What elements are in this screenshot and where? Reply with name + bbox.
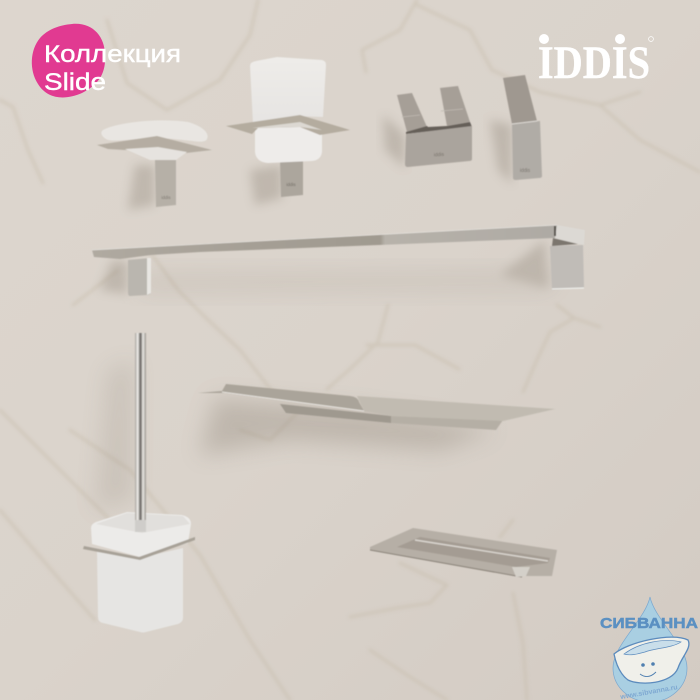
pink blob — [32, 24, 105, 97]
hook lower part — [512, 121, 542, 180]
tumbler upper glass — [250, 57, 326, 124]
product: soap dish: iddis — [161, 195, 171, 200]
brand name: СИБВАННА — [600, 615, 698, 632]
hook top part — [503, 75, 537, 124]
soap dish plate — [97, 136, 212, 153]
iddis logo: IDDIS — [538, 37, 650, 89]
product: toilet paper holder — [370, 528, 557, 577]
paper holder plate — [370, 528, 557, 577]
product: single hook: iddis — [520, 168, 531, 174]
shelf right plate — [357, 396, 555, 421]
soft wall shadows — [95, 115, 560, 510]
product: single hook — [503, 75, 542, 180]
left prong — [397, 93, 427, 132]
product: towel bar — [92, 225, 585, 296]
soap dish bracket — [155, 160, 176, 207]
right end cap — [553, 225, 585, 245]
shelf under lip — [280, 404, 391, 423]
brush upper glass — [91, 512, 191, 557]
product: double hook — [397, 86, 472, 167]
bar rail — [92, 225, 557, 259]
left bracket — [128, 258, 151, 296]
product: double hook: iddis — [434, 152, 445, 158]
badge: collection title — [32, 24, 181, 97]
product: shelf — [198, 384, 555, 430]
product: soap dish — [97, 120, 212, 207]
soap dish white tray — [101, 120, 208, 142]
product: toilet brush — [83, 333, 195, 632]
tumbler plate — [226, 115, 350, 135]
product: tumbler holder: iddis — [286, 182, 296, 187]
brush rod — [135, 333, 146, 520]
hook base — [405, 126, 472, 167]
paper holder tab — [512, 567, 530, 577]
right prong — [440, 86, 470, 126]
watermark: Sibvanna logo — [600, 597, 698, 700]
right bracket — [550, 245, 584, 290]
brush collar — [83, 537, 195, 560]
brush lower glass — [97, 548, 183, 632]
paper holder opening — [397, 537, 550, 567]
heading line two: Slide — [44, 69, 106, 96]
tumbler lower glass — [255, 126, 322, 163]
shelf left plate — [198, 384, 364, 411]
bath mascot — [614, 637, 689, 683]
water drop — [613, 597, 687, 700]
tumbler bracket — [280, 160, 303, 197]
product: tumbler holder — [226, 57, 350, 197]
heading: Коллекция: Коллекция — [44, 41, 181, 68]
